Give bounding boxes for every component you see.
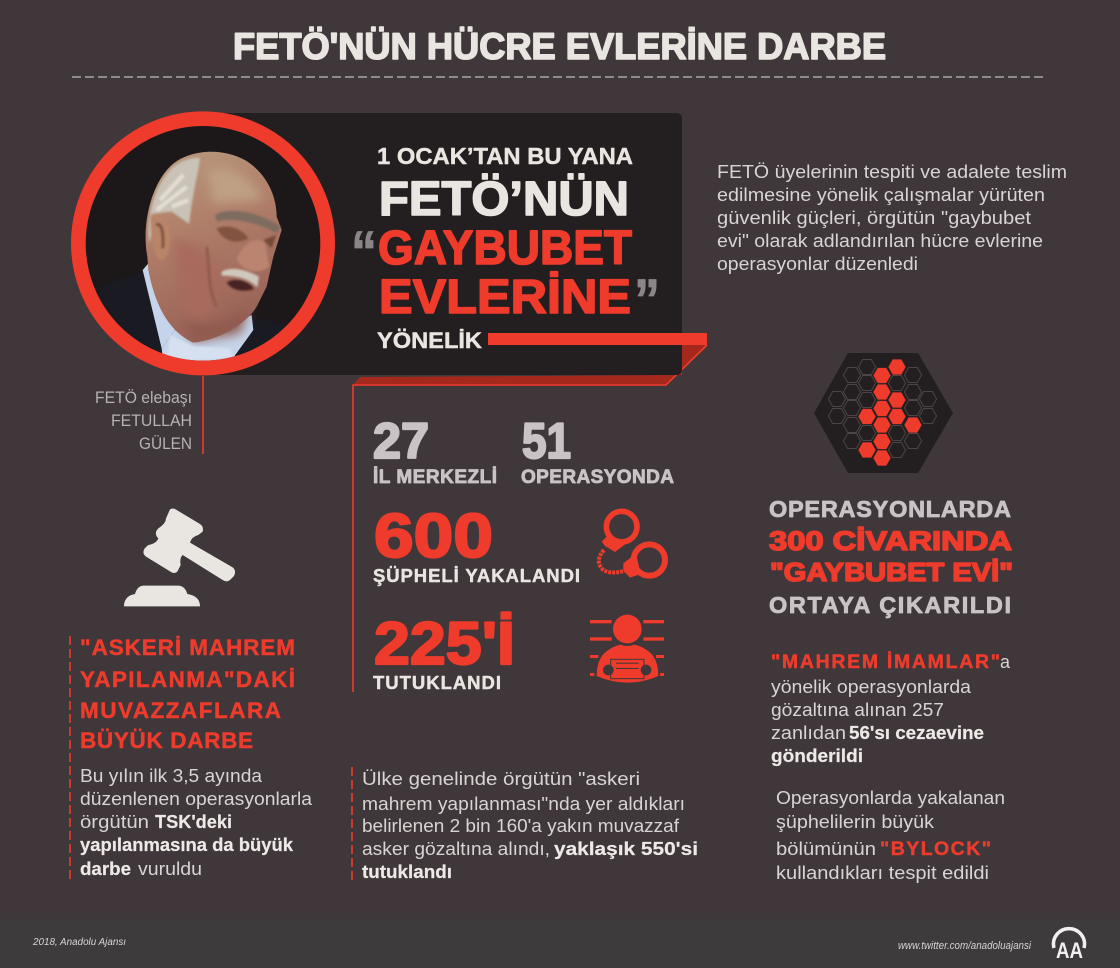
- stat: 225 arrested: TUTUKLANDI: [373, 672, 501, 693]
- headline line 5: YÖNELİK: [377, 328, 482, 353]
- text block: mahrem imamlar: zanlıdan: [771, 723, 846, 743]
- text block: military paragraph: vuruldu: [138, 859, 202, 879]
- text block: military heading: BÜYÜK DARBE: [80, 728, 253, 753]
- stat: 27 provinces: İL MERKEZLİ: [373, 467, 497, 488]
- text block: center paragraph: mahrem yapılanması"nda yer aldıkları: [362, 794, 685, 814]
- right headline: 300 cell houses: OPERASYONLARDA: [769, 496, 1011, 522]
- text block: mahrem imamlar: 56'sı cezaevine: [849, 723, 984, 743]
- text block: military heading: YAPILANMA"DAKİ: [80, 667, 295, 692]
- headline line 4: EVLERİNE: [379, 271, 631, 324]
- headline line 1: 1 OCAK’TAN BU YANA: [377, 143, 633, 169]
- right headline: 300 cell houses: 300 CİVARINDA: [769, 526, 1012, 556]
- text block: center paragraph: tutuklandı: [362, 862, 452, 882]
- caption: leader name: [95, 388, 192, 453]
- text block: mahrem imamlar: a: [1000, 652, 1011, 672]
- statistics: [373, 413, 674, 693]
- text block: military heading: "ASKERİ MAHREM: [80, 635, 295, 660]
- headline line 3: GAYBUBET: [378, 222, 632, 275]
- title: FETÖ'NÜN HÜCRE EVLERİNE DARBE: [233, 26, 886, 67]
- text block: military heading: [70, 635, 295, 880]
- text block: bylock: [776, 788, 1005, 883]
- intro paragraph: güvenlik güçleri, örgütün "gaybubet: [717, 208, 1031, 228]
- text block: military paragraph: Bu yılın ilk 3,5 ayında: [80, 766, 263, 786]
- right headline: 300 cell houses: [769, 496, 1013, 618]
- stat: 225 arrested: 225'İ: [374, 610, 515, 677]
- stat: 51 operations: [521, 413, 674, 488]
- text block: mahrem imamlar: gönderildi: [771, 746, 863, 766]
- text block: mahrem imamlar: [771, 650, 1011, 766]
- right headline: 300 cell houses: ORTAYA ÇIKARILDI: [769, 592, 1011, 618]
- stat: 600 suspects: 600: [374, 502, 493, 571]
- caption: leader name: FETULLAH: [111, 411, 192, 430]
- stat: 27 provinces: 27: [373, 413, 429, 469]
- intro paragraph: operasyonlar düzenledi: [717, 254, 918, 274]
- right headline: 300 cell houses: "GAYBUBET EVİ": [770, 557, 1013, 587]
- stat: 600 suspects: ŞÜPHELİ YAKALANDI: [373, 565, 580, 586]
- icon: hexagon cells: [814, 353, 953, 473]
- stat: 51 operations: OPERASYONDA: [521, 467, 674, 488]
- text block: center paragraph: asker gözaltına alındı,: [362, 839, 550, 859]
- footer: [0, 919, 1120, 968]
- text block: bylock: kullandıkları tespit edildi: [776, 863, 989, 883]
- logo: AA: [1054, 929, 1085, 963]
- text block: military paragraph: yapılanmasına da büyük: [80, 835, 294, 855]
- text block: bylock: bölümünün: [776, 839, 876, 859]
- copyright: 2018, Anadolu Ajansı: [32, 937, 126, 948]
- intro paragraph: [717, 162, 1067, 274]
- text block: mahrem imamlar: yönelik operasyonlarda: [771, 677, 972, 697]
- stat: 51 operations: 51: [522, 413, 571, 469]
- dark panel: [200, 113, 682, 375]
- ribbon fold: [353, 345, 707, 692]
- text block: mahrem imamlar: gözaltına alınan 257: [771, 700, 944, 720]
- text block: military paragraph: [80, 766, 313, 879]
- text block: military paragraph: TSK'deki: [155, 812, 232, 832]
- panel: headline banner: [200, 113, 707, 692]
- icon: handcuffs: [599, 511, 665, 578]
- red bar: [488, 333, 707, 345]
- stat: 27 provinces: [373, 413, 497, 488]
- text block: mahrem imamlar: "MAHREM İMAMLAR": [771, 650, 1000, 673]
- icon: gavel: [124, 508, 235, 606]
- text block: bylock: "BYLOCK": [880, 838, 991, 860]
- text block: military paragraph: örgütün: [80, 812, 149, 832]
- headline line 2: FETÖ’NÜN: [379, 173, 629, 226]
- text block: center paragraph: [352, 767, 698, 882]
- twitter url: www.twitter.com/anadoluajansi: [898, 940, 1031, 952]
- caption: leader name: GÜLEN: [139, 434, 192, 453]
- logo: AA: AA: [1056, 938, 1083, 963]
- text block: military paragraph: düzenlenen operasyonlarla: [80, 789, 313, 809]
- closing quote: ”: [634, 268, 660, 333]
- opening quote: “: [351, 220, 377, 285]
- text block: center paragraph: belirlenen 2 bin 160'a yakın muvazzaf: [362, 816, 680, 836]
- intro paragraph: FETÖ üyelerinin tespiti ve adalete teslim: [717, 162, 1067, 182]
- stat: 600 suspects: [373, 502, 580, 586]
- text block: military heading: MUVAZZAFLARA: [80, 698, 281, 723]
- icon: mugshot: [590, 612, 664, 683]
- caption line: [202, 376, 204, 454]
- text block: military paragraph: darbe: [80, 859, 131, 879]
- text block: bylock: şüphelilerin büyük: [776, 812, 935, 832]
- portrait: [78, 119, 328, 368]
- intro paragraph: edilmesine yönelik çalışmalar yürüten: [717, 185, 1045, 205]
- intro paragraph: evi" olarak adlandırılan hücre evlerine: [717, 231, 1043, 251]
- text block: center paragraph: yaklaşık 550'si: [554, 839, 698, 859]
- text block: center paragraph: Ülke genelinde örgütün "askeri: [362, 769, 640, 789]
- caption: leader name: FETÖ elebaşı: [95, 388, 192, 407]
- text block: bylock: Operasyonlarda yakalanan: [776, 788, 1005, 808]
